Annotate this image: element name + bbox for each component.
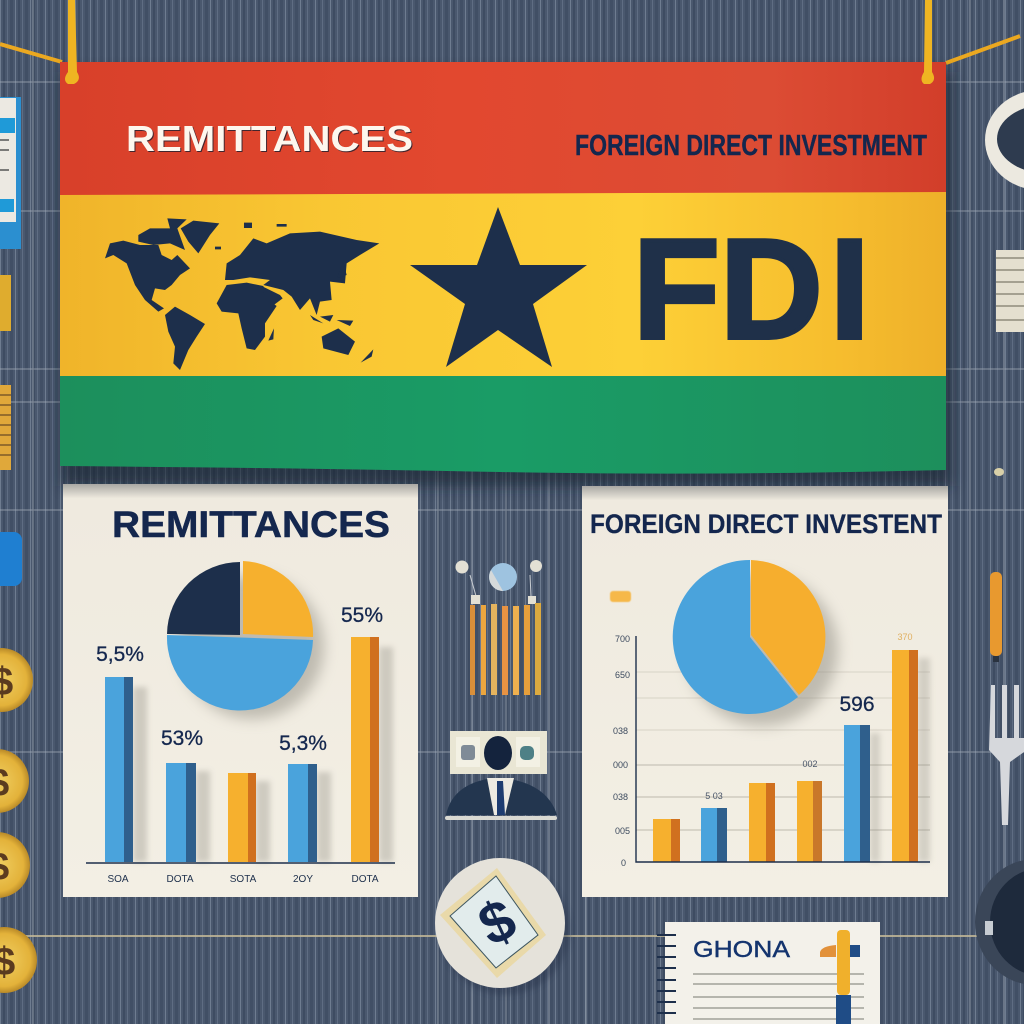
icon: abacus-like bars — [456, 560, 542, 695]
axis labels: 700 — [615, 634, 630, 644]
notebook lines — [693, 974, 864, 1019]
pencil — [820, 930, 860, 1024]
pie chart — [673, 560, 825, 714]
notebook spiral — [657, 935, 676, 1013]
hanging string right — [946, 36, 1020, 63]
orange marker — [610, 591, 631, 602]
star — [410, 207, 587, 367]
bar shadows — [133, 647, 393, 862]
icon: businessman and banknote — [445, 731, 557, 820]
value labels: 53% — [161, 727, 203, 750]
year labels: 2OY — [293, 874, 313, 885]
value label: 596 — [839, 693, 875, 716]
year labels: DOTA — [166, 874, 194, 885]
notebook — [657, 922, 880, 1024]
value labels: 5,3% — [279, 732, 327, 755]
axis labels: 038 — [613, 726, 628, 736]
flag heading: remittances: REMITTANCES — [126, 118, 413, 159]
icon: fork — [989, 685, 1024, 825]
bar chart — [653, 650, 918, 862]
yellow band — [60, 192, 946, 377]
panel: foreign direct investment — [582, 486, 948, 897]
icon: plate with dollar note: $ — [469, 886, 526, 959]
panel background — [63, 484, 418, 897]
axis labels: 000 — [613, 760, 628, 770]
faded small labels: 5 03 — [705, 791, 723, 801]
faded small labels: 002 — [802, 759, 818, 769]
axis labels: 005 — [615, 826, 630, 836]
icon: orange marker — [990, 572, 1002, 662]
flag heading: foreign direct investment: FOREIGN DIRECT INVESTMENT — [575, 130, 927, 162]
notebook title: GHONA — [693, 936, 791, 962]
icon: cup — [985, 90, 1024, 190]
chart baseline — [86, 862, 395, 864]
red band — [60, 62, 946, 197]
icon: paper stack — [996, 250, 1024, 332]
FDI text: FDI — [633, 210, 869, 369]
icon: plate with dollar note — [435, 858, 570, 995]
axis labels: 0 — [621, 858, 626, 868]
panel background — [582, 486, 948, 897]
green band — [60, 376, 946, 474]
bar chart — [105, 637, 379, 862]
value labels: 5,5% — [96, 643, 144, 666]
panel heading: REMITTANCES — [112, 504, 390, 545]
value labels: 55% — [341, 604, 383, 627]
icon: blue object — [0, 532, 22, 586]
panel: remittances — [63, 484, 418, 897]
icon: small clip — [994, 468, 1004, 476]
faded small labels: 370 — [897, 632, 913, 642]
coins — [0, 648, 37, 993]
flag banner — [60, 62, 952, 486]
axis labels: 650 — [615, 670, 630, 680]
value labels — [96, 604, 383, 755]
icon: gold block — [0, 275, 11, 331]
left side props — [0, 97, 37, 993]
panel heading: FOREIGN DIRECT INVESTENT — [590, 509, 942, 539]
axis labels: 038 — [613, 792, 628, 802]
right side props — [975, 90, 1024, 985]
icon: dark round device — [975, 859, 1024, 985]
pie chart shadow — [180, 575, 324, 719]
bar shadows — [870, 658, 930, 862]
axes — [636, 636, 930, 862]
year labels — [107, 874, 379, 885]
faded small labels — [705, 632, 913, 801]
pie chart — [167, 561, 313, 711]
flag shadow — [62, 72, 952, 486]
clothes peg right — [922, 0, 934, 84]
pie shadow — [686, 574, 838, 726]
year labels: SOA — [107, 874, 129, 885]
year labels: SOTA — [230, 874, 257, 885]
clothes peg left — [65, 0, 79, 84]
hanging string left — [0, 44, 62, 62]
grid lines — [636, 672, 930, 830]
icon: striped book — [0, 385, 11, 470]
year labels: DOTA — [351, 874, 379, 885]
icon: document card — [0, 97, 21, 249]
axis labels — [613, 634, 630, 868]
world map — [105, 218, 379, 370]
